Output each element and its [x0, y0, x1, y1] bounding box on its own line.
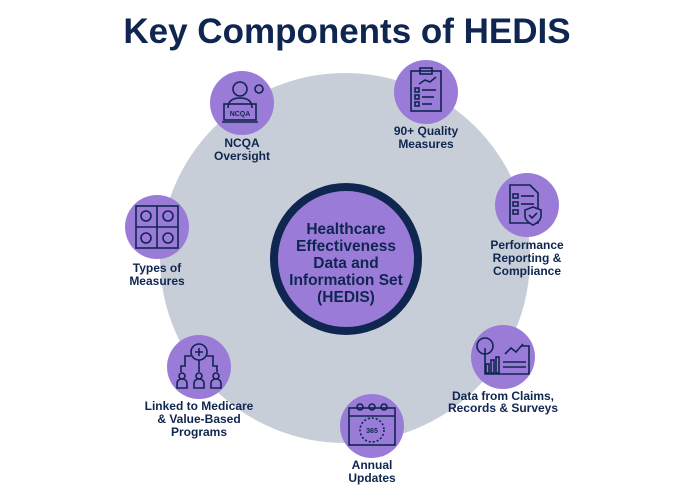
- center hub: (HEDIS): [317, 289, 375, 306]
- node: NCQA Oversight: Oversight: [214, 149, 270, 163]
- node: NCQA Oversight: NCQA: [230, 111, 250, 118]
- node: Data from Claims, Records & Surveys: [448, 325, 558, 415]
- node: 90+ Quality Measures: Measures: [398, 137, 454, 151]
- node: Linked to Medicare & Value-Based Programs: Programs: [171, 425, 227, 439]
- center hub: Data and: [313, 255, 379, 272]
- node: Linked to Medicare & Value-Based Programs: [145, 335, 254, 439]
- icon: calendar 365: [349, 404, 395, 445]
- node: Types of Measures: [125, 195, 189, 288]
- node: Performance Reporting & Compliance: Performance: [490, 238, 564, 252]
- node: Annual Updates: [340, 394, 404, 485]
- node: 90+ Quality Measures: 90+ Quality: [394, 124, 459, 138]
- center hub: Effectiveness: [296, 238, 396, 255]
- node: Annual Updates: Annual: [352, 458, 392, 472]
- icon: document with shield: [510, 185, 541, 225]
- center hub: Healthcare: [306, 221, 386, 238]
- background circle: [160, 73, 530, 443]
- center hub: Information Set: [289, 272, 403, 289]
- icon: person at laptop: [222, 82, 263, 122]
- title: Key Components of HEDIS: [123, 12, 571, 51]
- node: Linked to Medicare & Value-Based Programs: Linked to Medicare: [145, 399, 254, 413]
- node: Types of Measures: Types of: [133, 261, 182, 275]
- center hub: [274, 187, 418, 331]
- node: Annual Updates: Updates: [348, 471, 396, 485]
- icon: dashboard chart: [477, 338, 529, 374]
- node: NCQA Oversight: [210, 71, 274, 163]
- node: 90+ Quality Measures: [394, 60, 459, 151]
- node: Linked to Medicare & Value-Based Programs: & Value-Based: [157, 412, 241, 426]
- node: Performance Reporting & Compliance: Reporting &: [493, 251, 562, 265]
- node: Annual Updates: 365: [366, 428, 378, 435]
- icon: clipboard: [411, 68, 441, 111]
- node: NCQA Oversight: NCQA: [224, 136, 260, 150]
- node: Types of Measures: Measures: [129, 274, 185, 288]
- node: Performance Reporting & Compliance: [490, 173, 564, 278]
- node: Data from Claims, Records & Surveys: Data from Claims,: [452, 389, 554, 403]
- node: Data from Claims, Records & Surveys: Records & Surveys: [448, 401, 558, 415]
- icon: four-quadrant grid: [136, 206, 178, 248]
- node: Performance Reporting & Compliance: Compliance: [493, 264, 561, 278]
- icon: network with medical cross: [177, 344, 221, 388]
